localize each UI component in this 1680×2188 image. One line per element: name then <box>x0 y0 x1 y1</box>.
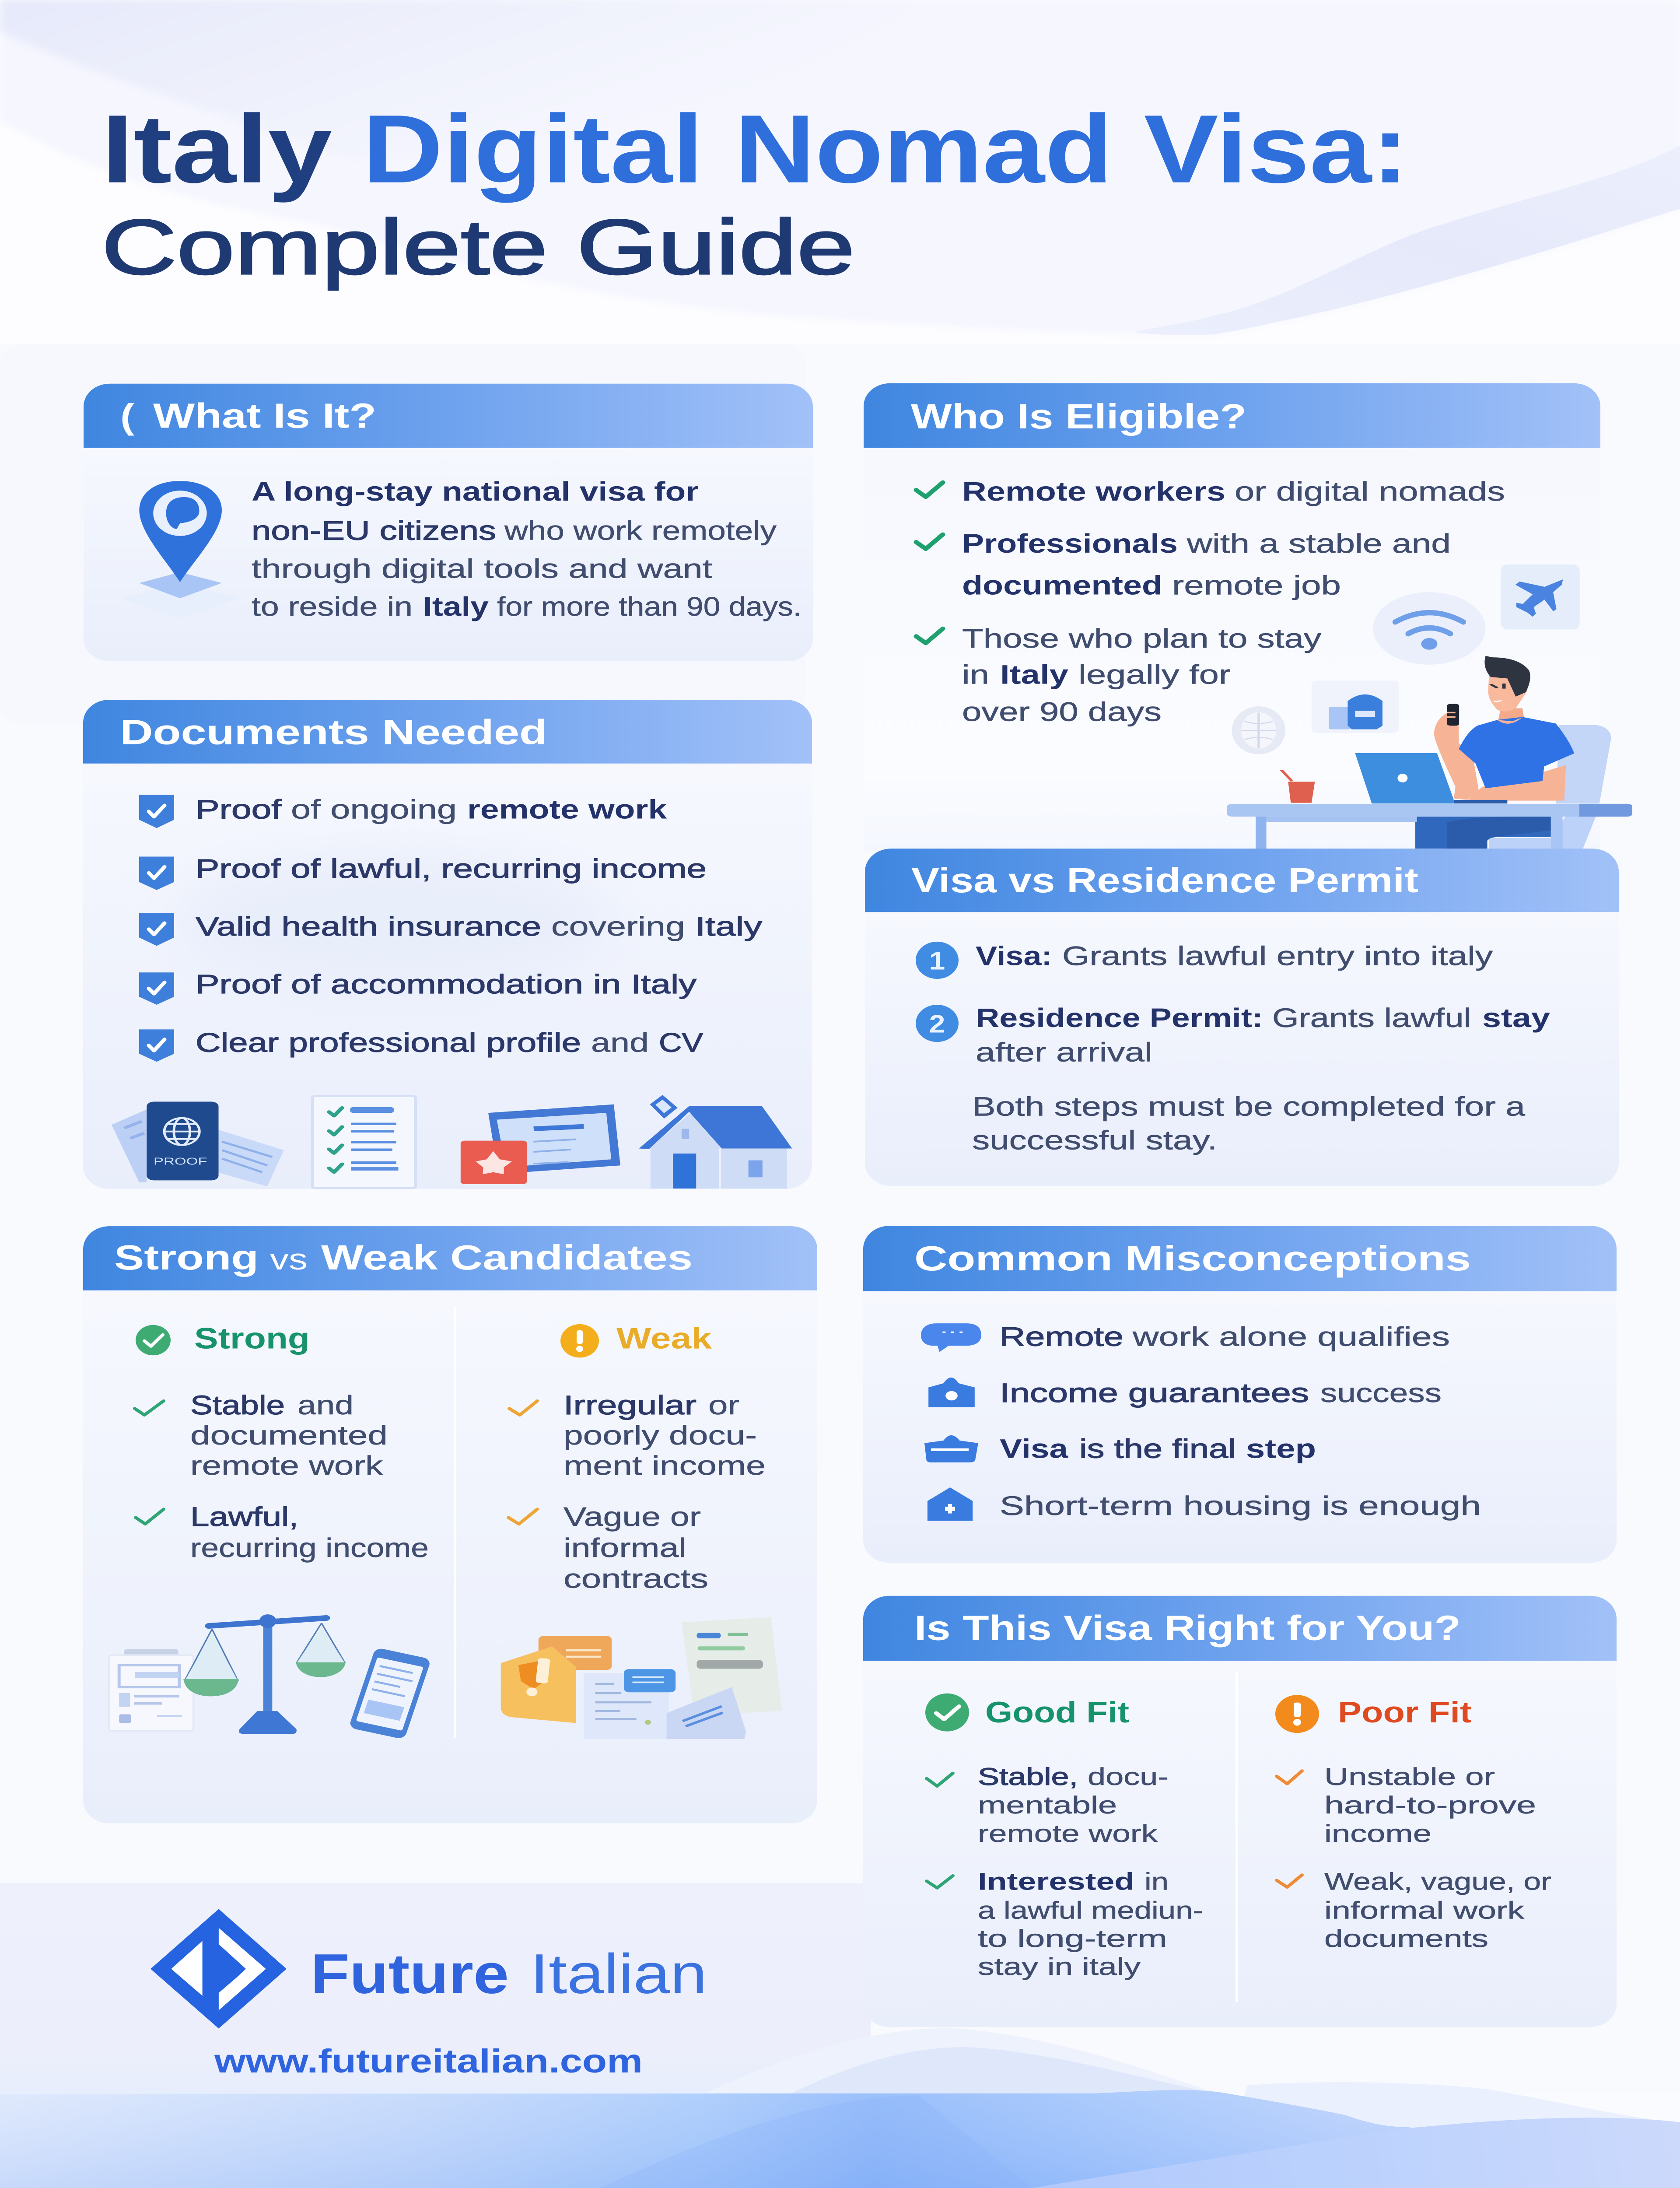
checklist: eligibility: or digital nomads <box>1235 477 1505 506</box>
column: poor fit: hard-to-prove <box>1324 1792 1536 1819</box>
panel: documents needed <box>83 700 812 1189</box>
checklist: documents <box>139 795 762 1062</box>
checklist: documents: Clear professional profile <box>196 1028 581 1058</box>
column: weak <box>508 1322 766 1593</box>
step 1 <box>916 941 1493 979</box>
column: strong: recurring income <box>190 1533 429 1563</box>
column: strong: Lawful, <box>190 1502 298 1532</box>
list: misconceptions <box>1000 1322 1481 1521</box>
checklist: documents: remote work <box>467 795 667 824</box>
list: misconceptions: is the final <box>1079 1434 1236 1464</box>
checklist: eligibility: remote job <box>1172 571 1341 600</box>
column: strong: Strong <box>194 1322 310 1355</box>
illustration: passport and documents: PROOF <box>154 1156 207 1167</box>
column: strong: documented <box>190 1421 388 1450</box>
column: good fit: docu- <box>1088 1763 1169 1790</box>
heading: strong vs weak: vs <box>270 1243 308 1276</box>
icon: map pin <box>120 481 241 618</box>
column: weak: poorly docu- <box>564 1421 757 1450</box>
list: misconceptions: step <box>1246 1434 1316 1464</box>
divider <box>454 1307 456 1738</box>
checklist: documents: Italy <box>695 912 762 941</box>
column: strong: and <box>298 1390 354 1420</box>
title <box>102 95 1409 291</box>
step 2: Grants lawful <box>1272 1003 1471 1033</box>
checklist: documents: Valid health insurance <box>196 912 541 941</box>
illustration: warnings and contracts <box>501 1617 782 1739</box>
checklist: eligibility: Professionals <box>962 529 1178 558</box>
column: good fit: Interested <box>978 1868 1134 1895</box>
title: Complete Guide <box>102 203 855 291</box>
checklist: eligibility: Remote workers <box>962 477 1225 506</box>
heading: who is eligible: Who Is Eligible? <box>911 397 1246 436</box>
text: description: Italy <box>423 592 489 621</box>
heading: is this visa right for you: Is This Visa Right for You? <box>914 1609 1461 1648</box>
column: poor fit: Unstable or <box>1324 1763 1495 1790</box>
step 2: Residence Permit: <box>976 1003 1263 1033</box>
checklist: eligibility: legally for <box>1078 660 1231 689</box>
column: poor fit: income <box>1324 1820 1432 1847</box>
checklist: eligibility: with a stable and <box>1186 529 1451 558</box>
column: poor fit: Poor Fit <box>1338 1696 1472 1729</box>
footer band <box>0 1883 1680 2188</box>
website url: www.futureitalian.com <box>214 2043 643 2080</box>
list: misconceptions: Remote <box>1000 1322 1124 1351</box>
heading: common misconceptions: Common Misconceptions <box>914 1239 1471 1278</box>
panel: who is eligible <box>864 383 1632 851</box>
note <box>972 1092 1526 1155</box>
list: misconceptions: Visa <box>1000 1434 1068 1464</box>
text: description: to reside in <box>252 592 413 621</box>
icons: misconceptions <box>921 1323 981 1521</box>
step 2: 2 <box>929 1010 945 1038</box>
step 2: after arrival <box>976 1038 1152 1067</box>
panel: what is it <box>84 384 813 661</box>
column: good fit: Good Fit <box>985 1696 1129 1729</box>
column: strong: remote work <box>190 1451 383 1480</box>
list: misconceptions: success <box>1320 1378 1442 1408</box>
column: weak: Weak <box>616 1322 712 1355</box>
column: good fit: in <box>1144 1868 1169 1895</box>
column: poor fit <box>1275 1695 1551 1952</box>
column: weak: informal <box>564 1533 686 1563</box>
panel: common misconceptions <box>863 1226 1617 1563</box>
checklist: documents: Proof of lawful, recurring income <box>196 854 707 884</box>
column: weak: Irregular <box>564 1390 696 1420</box>
step 1: Visa: <box>976 941 1052 971</box>
text: description: non-EU citizens <box>252 516 496 545</box>
column: good fit: stay in italy <box>978 1953 1141 1980</box>
step 2 <box>916 1003 1550 1067</box>
heading: what is it: ( <box>120 397 134 436</box>
checklist: eligibility: Italy <box>1000 660 1069 689</box>
icons: shield checks <box>139 795 174 1062</box>
logo: future italian: Future <box>311 1943 509 2005</box>
heading: strong vs weak <box>114 1238 693 1277</box>
illustration: passport and documents <box>112 1095 792 1189</box>
column: poor fit: informal work <box>1324 1897 1525 1924</box>
checklist: documents: of ongoing <box>291 795 457 824</box>
checklist: documents: covering <box>551 912 685 941</box>
step 2: stay <box>1482 1003 1550 1033</box>
column: good fit: remote work <box>978 1820 1158 1847</box>
text: description: who work remotely <box>504 516 777 545</box>
checklist: eligibility: over 90 days <box>962 697 1162 727</box>
checklist: eligibility: in <box>962 660 989 689</box>
checklist: documents: and <box>591 1028 649 1058</box>
note: Both steps must be completed for a <box>972 1092 1526 1121</box>
column: good fit: Stable, <box>978 1763 1078 1790</box>
heading: documents needed: Documents Needed <box>120 713 547 752</box>
list: misconceptions: Income guarantees <box>1000 1378 1309 1408</box>
panel: strong vs weak candidates <box>83 1226 817 1823</box>
checklist: documents: CV <box>659 1028 703 1058</box>
checklist: eligibility: documented <box>962 571 1162 600</box>
icon: diamond mark <box>150 1909 287 2029</box>
step 1: Grants lawful entry into italy <box>1062 941 1493 971</box>
divider <box>1236 1671 1238 2002</box>
column: good fit: mentable <box>978 1792 1117 1819</box>
column: weak: contracts <box>564 1564 708 1593</box>
heading: strong vs weak: Weak Candidates <box>321 1238 693 1277</box>
illustration: plane and wifi icons <box>1373 565 1580 665</box>
column: poor fit: Weak, vague, or <box>1324 1868 1551 1895</box>
column: weak: Vague or <box>564 1502 701 1532</box>
text: description <box>252 477 802 621</box>
checklist: documents: Proof of accommodation in Italy <box>196 969 696 999</box>
column: weak: or <box>708 1390 739 1420</box>
column: poor fit: documents <box>1324 1925 1488 1952</box>
title: Italy <box>102 95 332 203</box>
heading: strong vs weak: Strong <box>114 1238 259 1277</box>
list: misconceptions: Short-term housing is enough <box>1000 1491 1481 1521</box>
column: weak: ment income <box>564 1451 766 1480</box>
column: strong <box>135 1322 429 1563</box>
checklist: documents: Proof <box>196 795 282 824</box>
note: successful stay. <box>972 1126 1217 1155</box>
checklist: eligibility: Those who plan to stay <box>962 624 1321 653</box>
column: good fit: a lawful mediun- <box>978 1897 1203 1924</box>
illustration: remote worker at desk <box>1227 656 1632 849</box>
column: good fit <box>925 1694 1203 1980</box>
title: Digital Nomad Visa: <box>362 95 1409 203</box>
text: description: A long-stay national visa for <box>252 477 699 506</box>
logo: future italian: Italian <box>530 1943 707 2005</box>
heading: what is it: What Is It? <box>153 396 376 435</box>
illustration: scale and documents <box>109 1614 431 1739</box>
heading: visa vs residence permit: Visa vs Residence Permit <box>911 861 1418 900</box>
step 1: 1 <box>929 947 945 975</box>
list: misconceptions: work alone qualifies <box>1132 1322 1450 1351</box>
column: good fit: to long-term <box>978 1925 1167 1952</box>
checklist: eligibility <box>916 477 1505 727</box>
panel: visa vs residence permit <box>865 849 1619 1186</box>
text: description: for more than 90 days. <box>497 592 802 621</box>
column: strong: Stable <box>190 1390 285 1420</box>
text: description: through digital tools and want <box>252 554 712 583</box>
logo: future italian <box>150 1909 707 2029</box>
panel: is this visa right for you <box>863 1596 1617 2027</box>
